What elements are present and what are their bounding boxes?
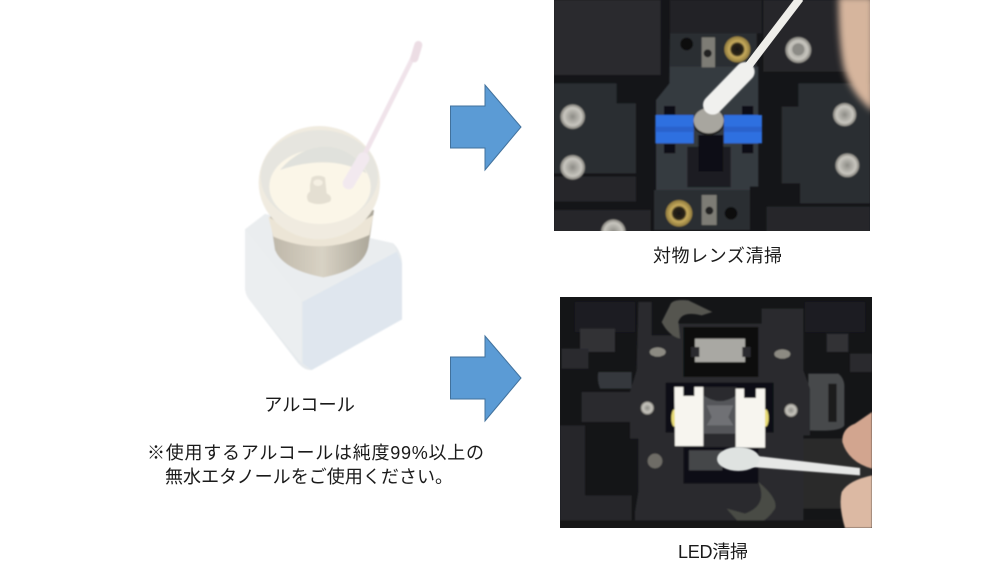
white blocks xyxy=(671,409,677,427)
icon: screws xyxy=(560,37,860,244)
screws xyxy=(641,401,654,415)
arrow: bottom xyxy=(450,336,521,421)
panel: LED cleaning photo xyxy=(560,297,872,528)
arrow: top xyxy=(450,85,521,170)
icon: cotton swab and finger xyxy=(713,0,873,112)
icon: bottle neck xyxy=(270,210,374,277)
icon: cotton swab xyxy=(349,45,418,183)
panel: alcohol bottle photo xyxy=(245,45,418,370)
slots and inserts xyxy=(702,37,715,67)
label: alcohol: アルコール xyxy=(264,395,355,415)
icon: bottle body xyxy=(245,214,402,370)
central frame xyxy=(582,302,810,525)
icon: fingers and cotton swab xyxy=(717,412,872,528)
note: alcohol purity: ※使用するアルコールは純度99%以上の xyxy=(147,443,484,463)
lens xyxy=(692,122,724,136)
center carrier xyxy=(655,60,760,190)
label: LED cleaning: LED清掃 xyxy=(678,542,748,562)
blue bands xyxy=(655,115,694,143)
icon: lid xyxy=(259,126,380,239)
infographic canvas xyxy=(150,0,872,560)
note: alcohol purity: 無水エタノールをご使用ください。 xyxy=(165,467,453,487)
note: alcohol purity xyxy=(147,443,484,487)
panel: objective lens cleaning photo xyxy=(554,0,873,244)
label: objective lens cleaning: 対物レンズ清掃 xyxy=(653,246,782,266)
